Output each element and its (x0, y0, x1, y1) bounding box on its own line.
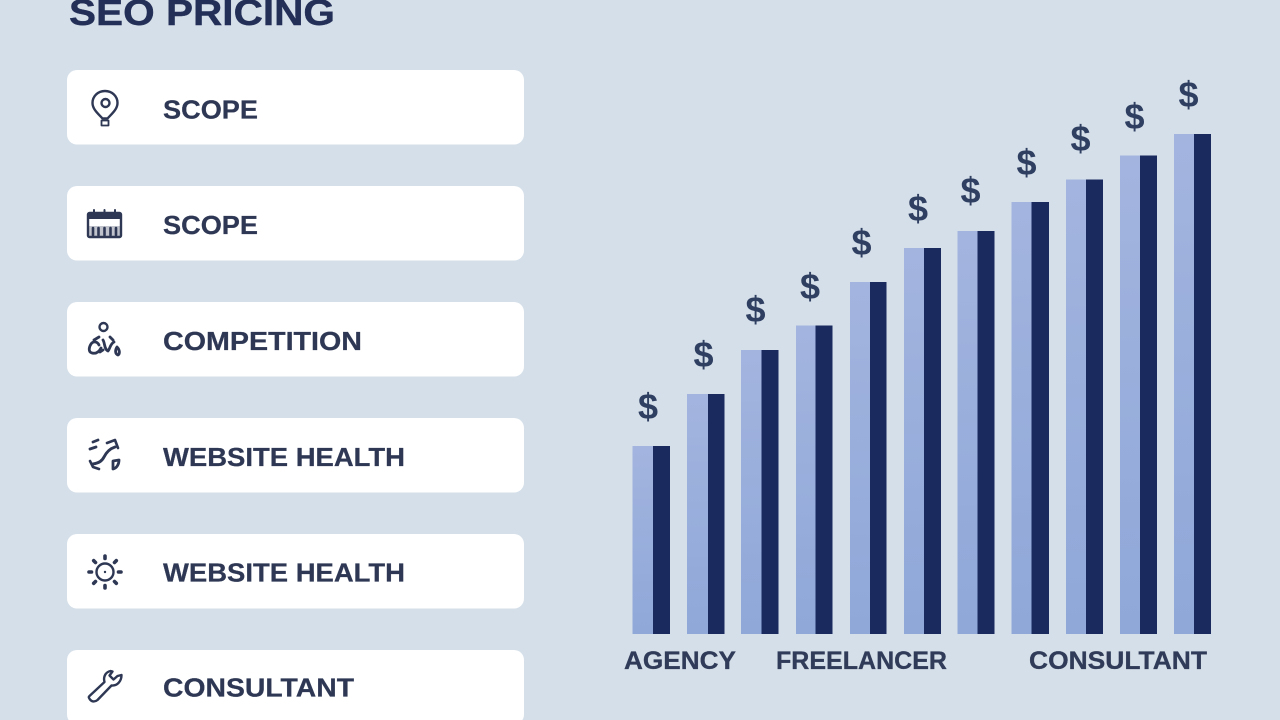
icon: gear (89, 556, 121, 588)
bar chart: cost by provider (624, 74, 1211, 675)
card: scope with calendar (67, 186, 524, 260)
card: website health with gear (67, 534, 524, 608)
label: website health: WEBSITE HEALTH (163, 558, 405, 588)
icon: wrench (89, 671, 122, 701)
bars: light and dark pairs (632, 134, 1211, 634)
dollar sign markers: $ (908, 188, 928, 229)
dollar sign markers: $ (1178, 74, 1199, 115)
dollar sign markers: $ (960, 170, 981, 211)
dollar sign markers: $ (693, 334, 714, 375)
card: competition (67, 302, 524, 376)
dollar sign markers: $ (1016, 142, 1037, 183)
dollar sign markers (638, 74, 1199, 427)
icon: calendar (88, 210, 121, 237)
axis label: freelancer: FREELANCER (776, 647, 947, 675)
label: website health: WEBSITE HEALTH (163, 442, 405, 472)
label: scope: SCOPE (163, 94, 258, 124)
axis label: agency: AGENCY (624, 647, 736, 675)
icon: location pin (92, 91, 118, 126)
card: scope with location pin (67, 70, 524, 144)
axis label: consultant: CONSULTANT (1029, 647, 1207, 675)
card: website health with arrows (67, 418, 524, 492)
panel: factor list (67, 70, 524, 720)
dollar sign markers: $ (1070, 118, 1091, 159)
label: scope: SCOPE (163, 210, 258, 240)
icon: exchange arrows (90, 440, 119, 469)
label: consultant: CONSULTANT (163, 672, 354, 702)
dollar sign markers: $ (745, 289, 766, 330)
dollar sign markers: $ (1124, 96, 1145, 137)
label: competition: COMPETITION (163, 326, 362, 356)
dollar sign markers: $ (851, 222, 872, 263)
icon: competitors group (89, 323, 119, 355)
card: consultant (67, 650, 524, 720)
dollar sign markers: $ (638, 386, 658, 427)
dollar sign markers: $ (800, 266, 820, 307)
